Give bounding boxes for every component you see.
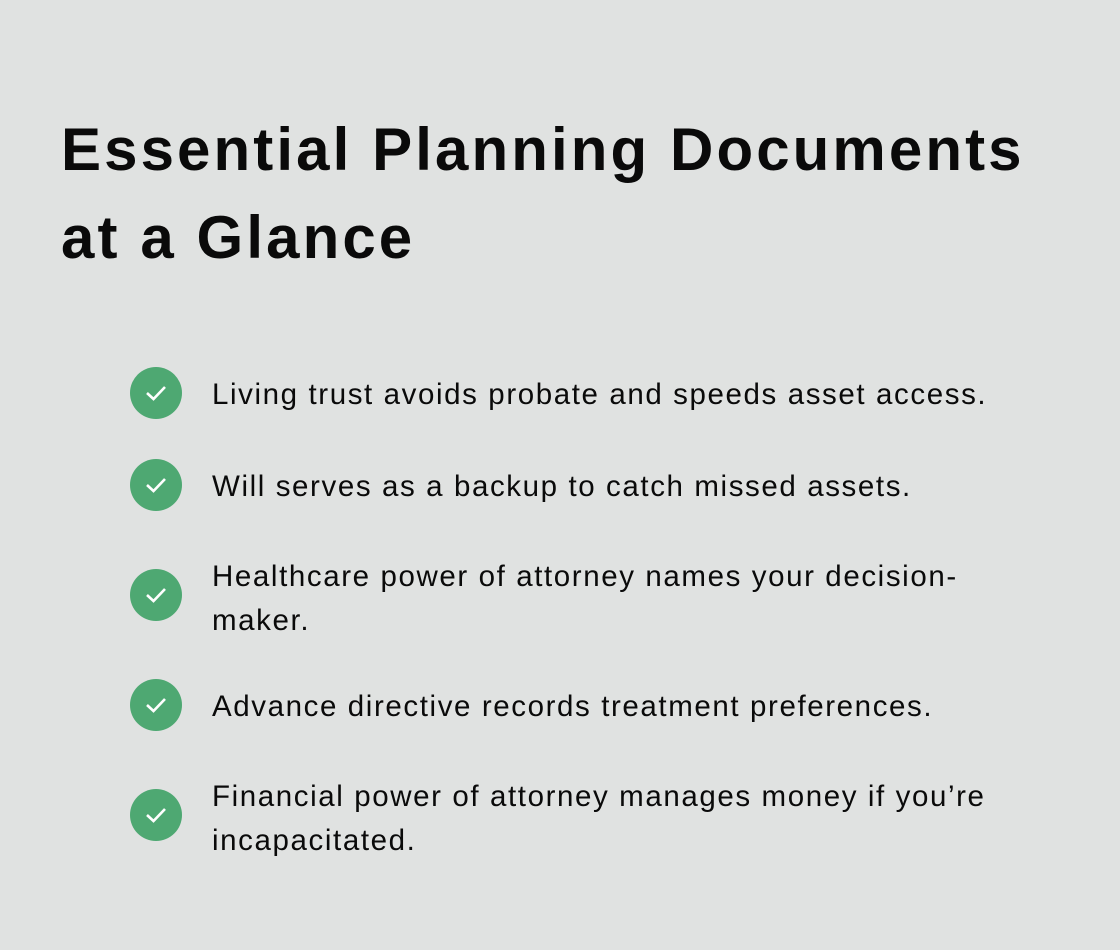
text (212, 780, 986, 857)
text (212, 560, 958, 637)
text: incapacitated. (212, 824, 416, 857)
item: advance directive (130, 679, 933, 731)
item: healthcare POA (130, 560, 958, 637)
text: Financial power of attorney manages money if you’re (212, 780, 986, 813)
item: living trust (130, 367, 987, 419)
text: Living trust avoids probate and speeds asset access. (212, 378, 987, 411)
icon: check (130, 367, 182, 419)
icon: check (130, 569, 182, 621)
icon: check (130, 459, 182, 511)
title: at a Glance (61, 204, 415, 271)
icon: check (130, 789, 182, 841)
item: financial POA (130, 780, 986, 857)
text: Healthcare power of attorney names your decision- (212, 560, 958, 593)
text: Will serves as a backup to catch missed assets. (212, 470, 912, 503)
icon: check (130, 679, 182, 731)
text: maker. (212, 604, 310, 637)
item: will (130, 459, 912, 511)
title: Essential Planning Documents (61, 116, 1025, 183)
title (61, 116, 1025, 271)
text: Advance directive records treatment preferences. (212, 690, 933, 723)
